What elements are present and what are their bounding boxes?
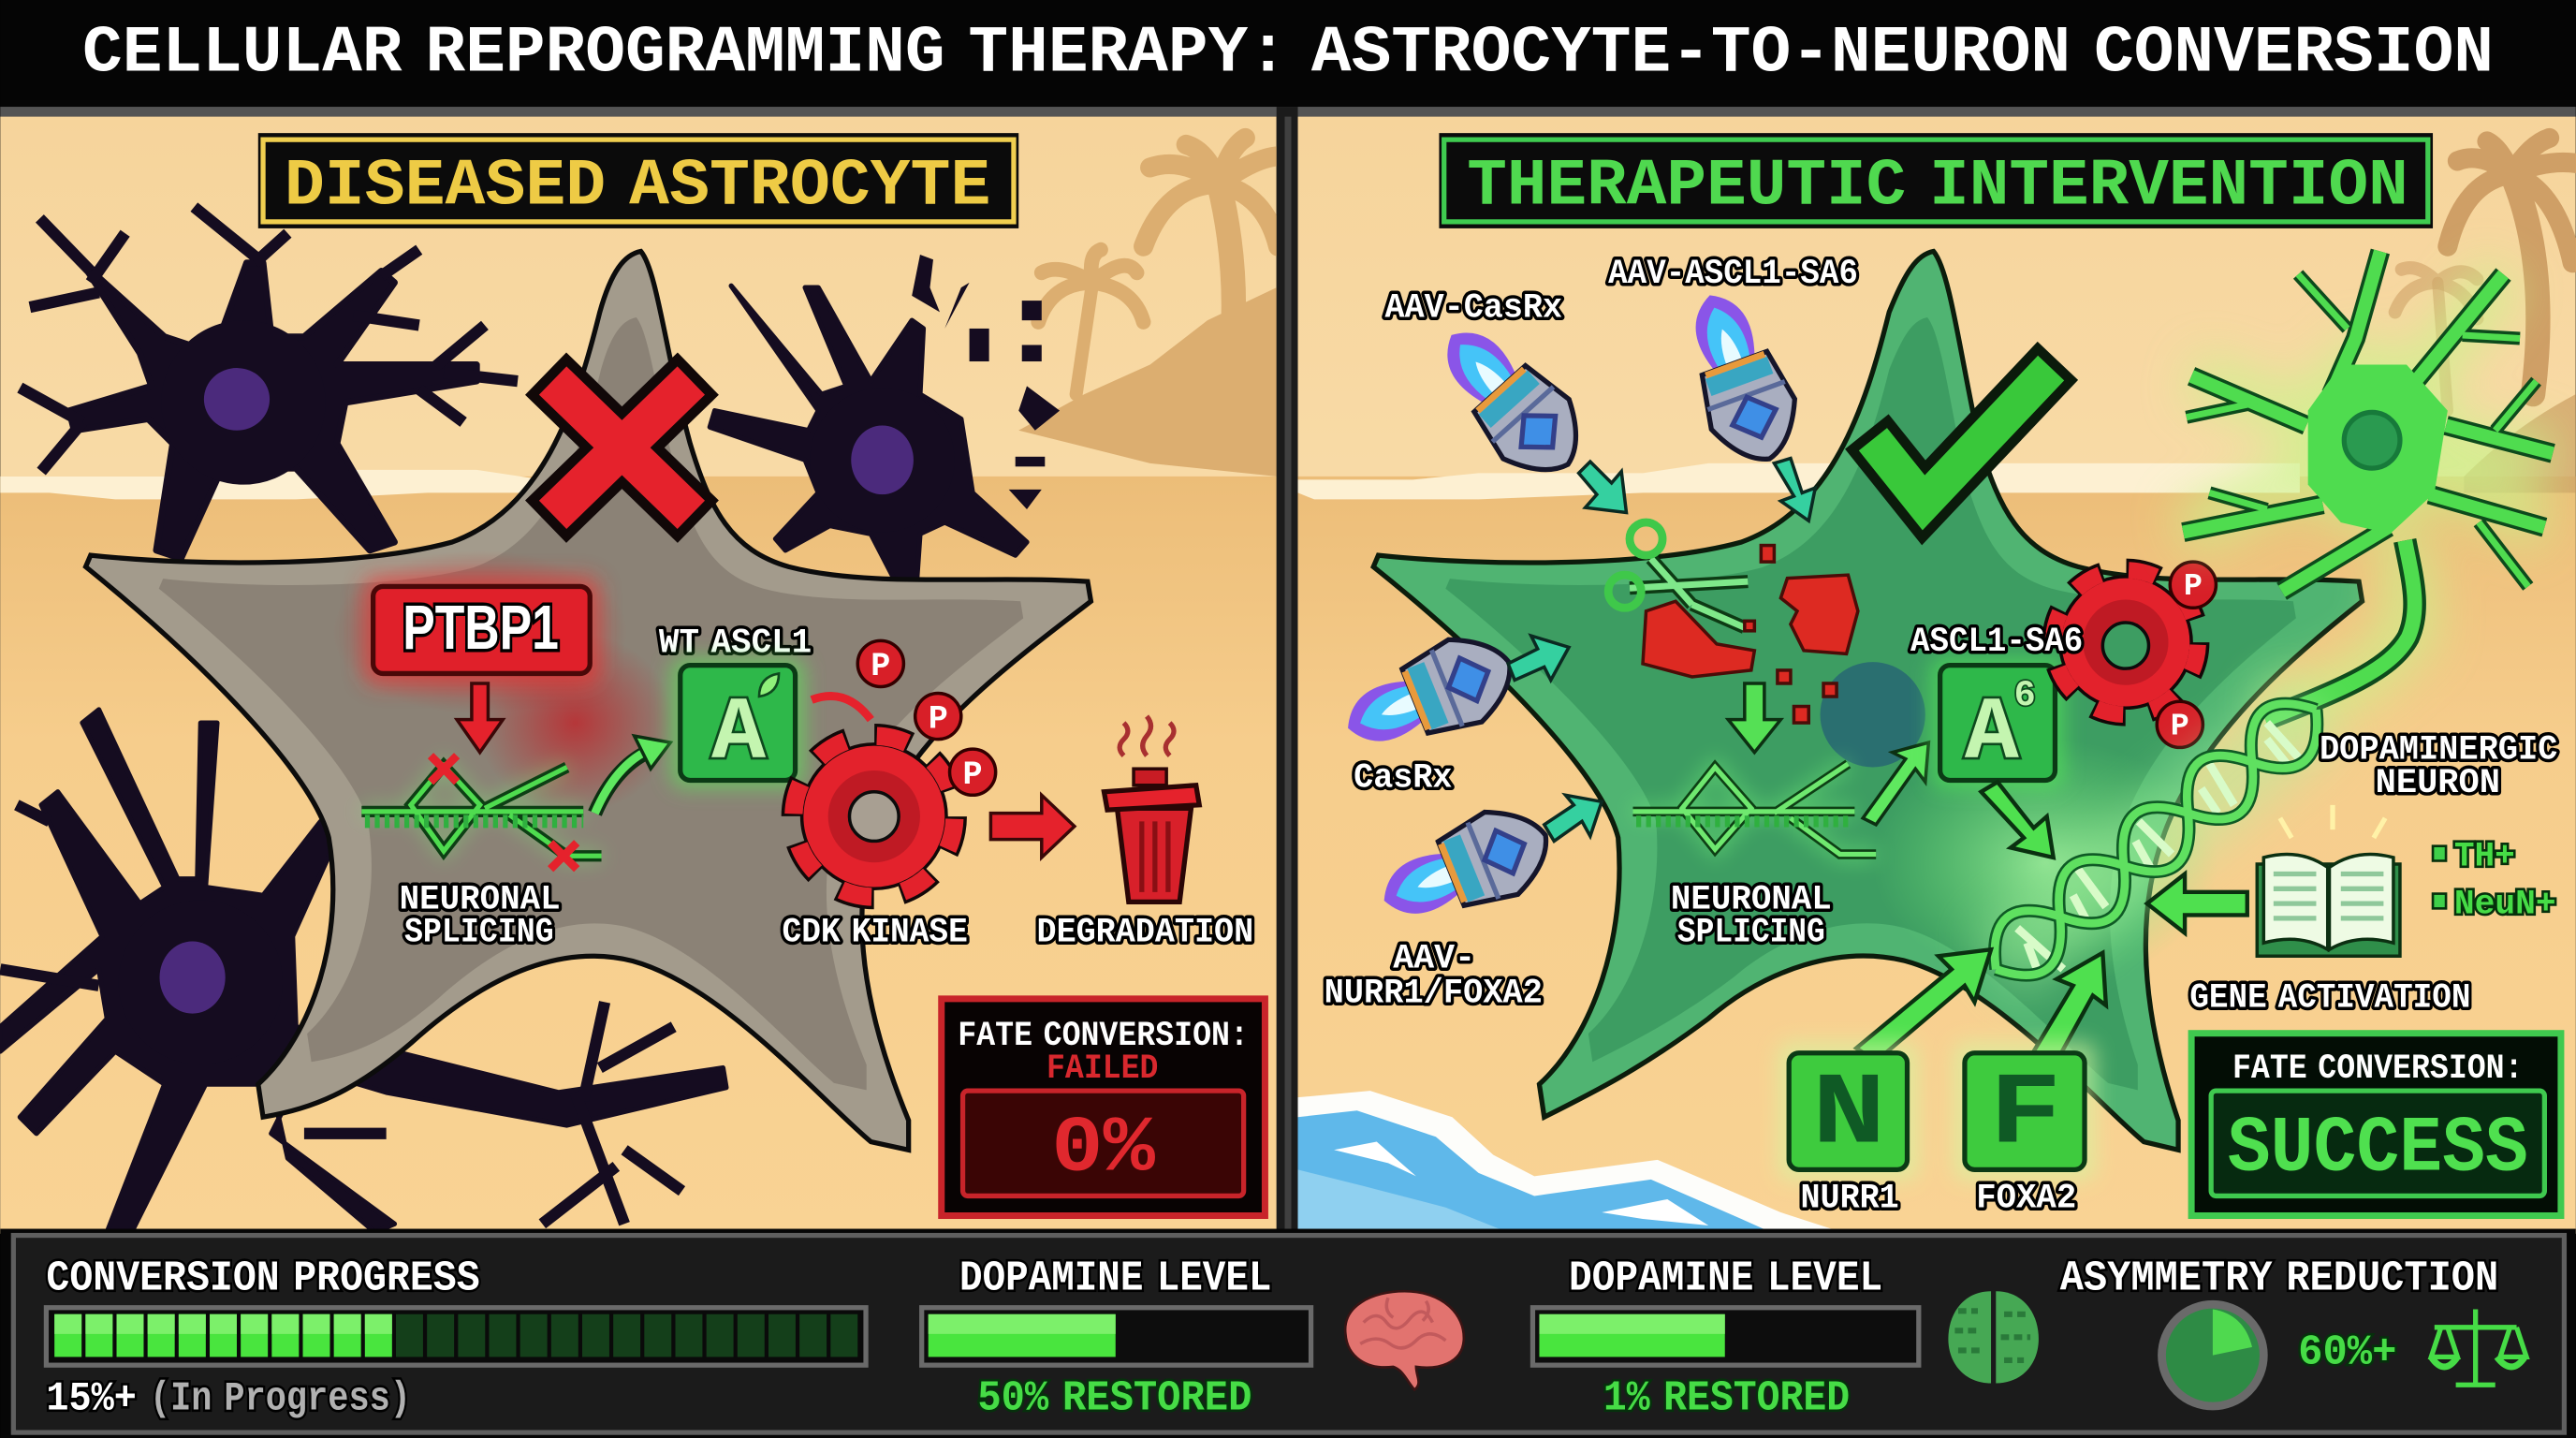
progress value: (In Progress): [150, 1376, 411, 1423]
label: ASCL1-SA6: ASCL1-SA6: [1910, 623, 2083, 662]
nucleus: [204, 368, 270, 431]
neuron: upper left: [20, 207, 518, 559]
phosphate P badges: P: [929, 700, 948, 738]
phosphate P badges: P: [2171, 709, 2189, 744]
neuron: lower left: [0, 710, 726, 1232]
phosphate P badges: P: [871, 648, 890, 685]
label: AAV-ASCL1-SA6: AAV-ASCL1-SA6: [1608, 255, 1858, 294]
markers: TH+ and NeuN+: TH+: [2454, 838, 2515, 877]
label: neuronal splicing: NEURONAL: [1671, 880, 1832, 919]
header bar: [0, 0, 2576, 107]
phosphate P badges: P: [963, 756, 983, 794]
icon: rocket AAV-ASCL1-SA6: [1668, 280, 1811, 474]
arrow: kinase to degradation: [990, 795, 1075, 858]
panel: therapeutic intervention: [1298, 117, 2576, 1234]
label: neuronal splicing: [400, 880, 561, 952]
diseased astrocyte body: [86, 251, 1090, 1150]
icon: open book gene activation: [2257, 805, 2400, 956]
callout: fate conversion success: FATE CONVERSION:: [2232, 1049, 2524, 1089]
metric: dopamine level heading: DOPAMINE LEVEL: [959, 1254, 1271, 1302]
icon: trash bin: [1104, 716, 1199, 902]
label: dopaminergic neuron: NEURON: [2376, 764, 2500, 803]
arrow: phosphorylation: [812, 697, 871, 720]
gauge: asymmetry pie: [2162, 1304, 2263, 1406]
dopaminergic neuron: [2183, 251, 2553, 720]
dopamine bar 1%: [1532, 1308, 1919, 1365]
panel: metrics bar: [0, 1229, 2576, 1438]
cleaved PTBP1 mRNA: [1643, 546, 1858, 723]
tile: NURR1: N: [1812, 1057, 1886, 1173]
label: neuronal splicing: SPLICING: [404, 913, 554, 952]
ocean waves: [1298, 1091, 1847, 1234]
neuronal splicing diagram: [361, 756, 602, 869]
icon: green check: [1884, 381, 2039, 503]
label: CDK kinase: CDK KINASE: [783, 913, 968, 952]
heading: diseased astrocyte: DISEASED ASTROCYTE: [285, 151, 990, 225]
arrow: PTBP1 to splicing: [457, 683, 503, 753]
nucleus: [160, 941, 226, 1014]
label: AAV-NURR1/FOXA2: AAV-: [1393, 940, 1475, 979]
label: AAV-CasRx: AAV-CasRx: [1385, 289, 1562, 329]
icon: red X: [567, 394, 677, 501]
neuron: upper right fragmenting: [710, 255, 1060, 581]
callout: fate conversion failed: 0%: [1051, 1105, 1155, 1194]
progress value: 15%+: [46, 1376, 137, 1423]
label: dopaminergic neuron: [2320, 731, 2557, 803]
metric: dopamine level heading: DOPAMINE LEVEL: [1569, 1254, 1882, 1302]
metric: asymmetry reduction heading: ASYMMETRY REDUCTION: [2060, 1254, 2498, 1302]
progress value: [46, 1376, 411, 1423]
nucleus: [851, 425, 914, 494]
icon: scissors: [1608, 522, 1748, 627]
label: FOXA2: FOXA2: [1976, 1180, 2076, 1219]
heading: therapeutic intervention: THERAPEUTIC INTERVENTION: [1467, 151, 2408, 225]
value: 60%+: 60%+: [2298, 1328, 2396, 1376]
arrows into DNA helix: [1856, 782, 2247, 1062]
background: palm trees: [2395, 138, 2576, 492]
arrow: splicing to ASCL1: [595, 749, 654, 814]
DNA helix: [1995, 704, 2317, 976]
callout: fate conversion failed: [942, 999, 1265, 1215]
arrow: down to splicing: [1728, 683, 1780, 753]
tile: FOXA2: F: [1989, 1057, 2061, 1173]
phosphate P badges: [857, 640, 996, 795]
icon: balance scale: [2431, 1310, 2526, 1385]
label: WT ASCL1: WT ASCL1: [659, 624, 812, 664]
label: NURR1: NURR1: [1800, 1180, 1899, 1219]
icon: CDK kinase gear: [794, 736, 955, 897]
label: neuronal splicing: [1671, 880, 1832, 952]
callout: fate conversion success: [2191, 1034, 2561, 1215]
panel: diseased astrocyte: [0, 117, 1281, 1234]
progress bar: [46, 1308, 866, 1365]
title: CELLULAR REPROGRAMMING THERAPY: ASTROCYTE-TO-NEURON CONVERSION: [82, 17, 2494, 91]
value: 1% restored: 1% RESTORED: [1603, 1374, 1850, 1423]
markers: TH+ and NeuN+: [2433, 838, 2556, 925]
callout: fate conversion failed: FATE CONVERSION:: [958, 1017, 1249, 1056]
therapeutic astrocyte body: [1373, 251, 2363, 1150]
neuronal splicing diagram: [1632, 764, 1876, 854]
icon: pink brain: [1345, 1291, 1464, 1389]
tile: NURR1: [1778, 1041, 1919, 1181]
PTBP1 box: [361, 575, 602, 686]
dopamine bar 50%: [922, 1308, 1311, 1365]
label: neuronal splicing: NEURONAL: [400, 880, 561, 919]
value: 50% restored: 50% RESTORED: [977, 1374, 1251, 1423]
tile: ASCL1-SA6: A: [1965, 684, 2019, 785]
metric: conversion progress heading: CONVERSION PROGRESS: [46, 1254, 480, 1302]
tile: FOXA2: [1954, 1041, 2096, 1181]
teal arrows: [1508, 459, 1815, 841]
center divider: [1277, 107, 1298, 1234]
tile: WT ASCL1: A: [711, 684, 766, 785]
tile: ASCL1-SA6: [1930, 657, 2065, 788]
label: CasRx: CasRx: [1354, 759, 1452, 799]
label: neuronal splicing: SPLICING: [1677, 913, 1825, 952]
tile: WT ASCL1: [670, 657, 805, 788]
icon: green brain: [1948, 1291, 2039, 1383]
icon: rocket CasRx: [1331, 622, 1526, 770]
icon: rocket AAV-CasRx: [1418, 305, 1601, 494]
markers: TH+ and NeuN+: NeuN+: [2454, 886, 2556, 925]
callout: fate conversion success: SUCCESS: [2228, 1105, 2528, 1194]
tile: ASCL1-SA6: 6: [2014, 675, 2036, 716]
label: AAV-NURR1/FOXA2: NURR1/FOXA2: [1325, 974, 1543, 1013]
PTBP1 box: PTBP1: [402, 594, 559, 663]
callout: fate conversion failed: FAILED: [1046, 1049, 1158, 1089]
phosphate P badges: P: [2184, 569, 2203, 605]
label: AAV-NURR1/FOXA2: [1325, 940, 1543, 1013]
arrow: splicing to ASCL1-SA6: [1863, 742, 1928, 825]
icon: rocket AAV-NURR1/FOXA2: [1368, 794, 1562, 942]
label: degradation: DEGRADATION: [1037, 913, 1253, 952]
label: gene activation: GENE ACTIVATION: [2189, 979, 2470, 1019]
icon: red gear: [2054, 570, 2198, 714]
background: palm trees and hill: [1018, 138, 1281, 477]
label: dopaminergic neuron: DOPAMINERGIC: [2320, 731, 2557, 770]
phosphate P badges: [2157, 562, 2216, 747]
